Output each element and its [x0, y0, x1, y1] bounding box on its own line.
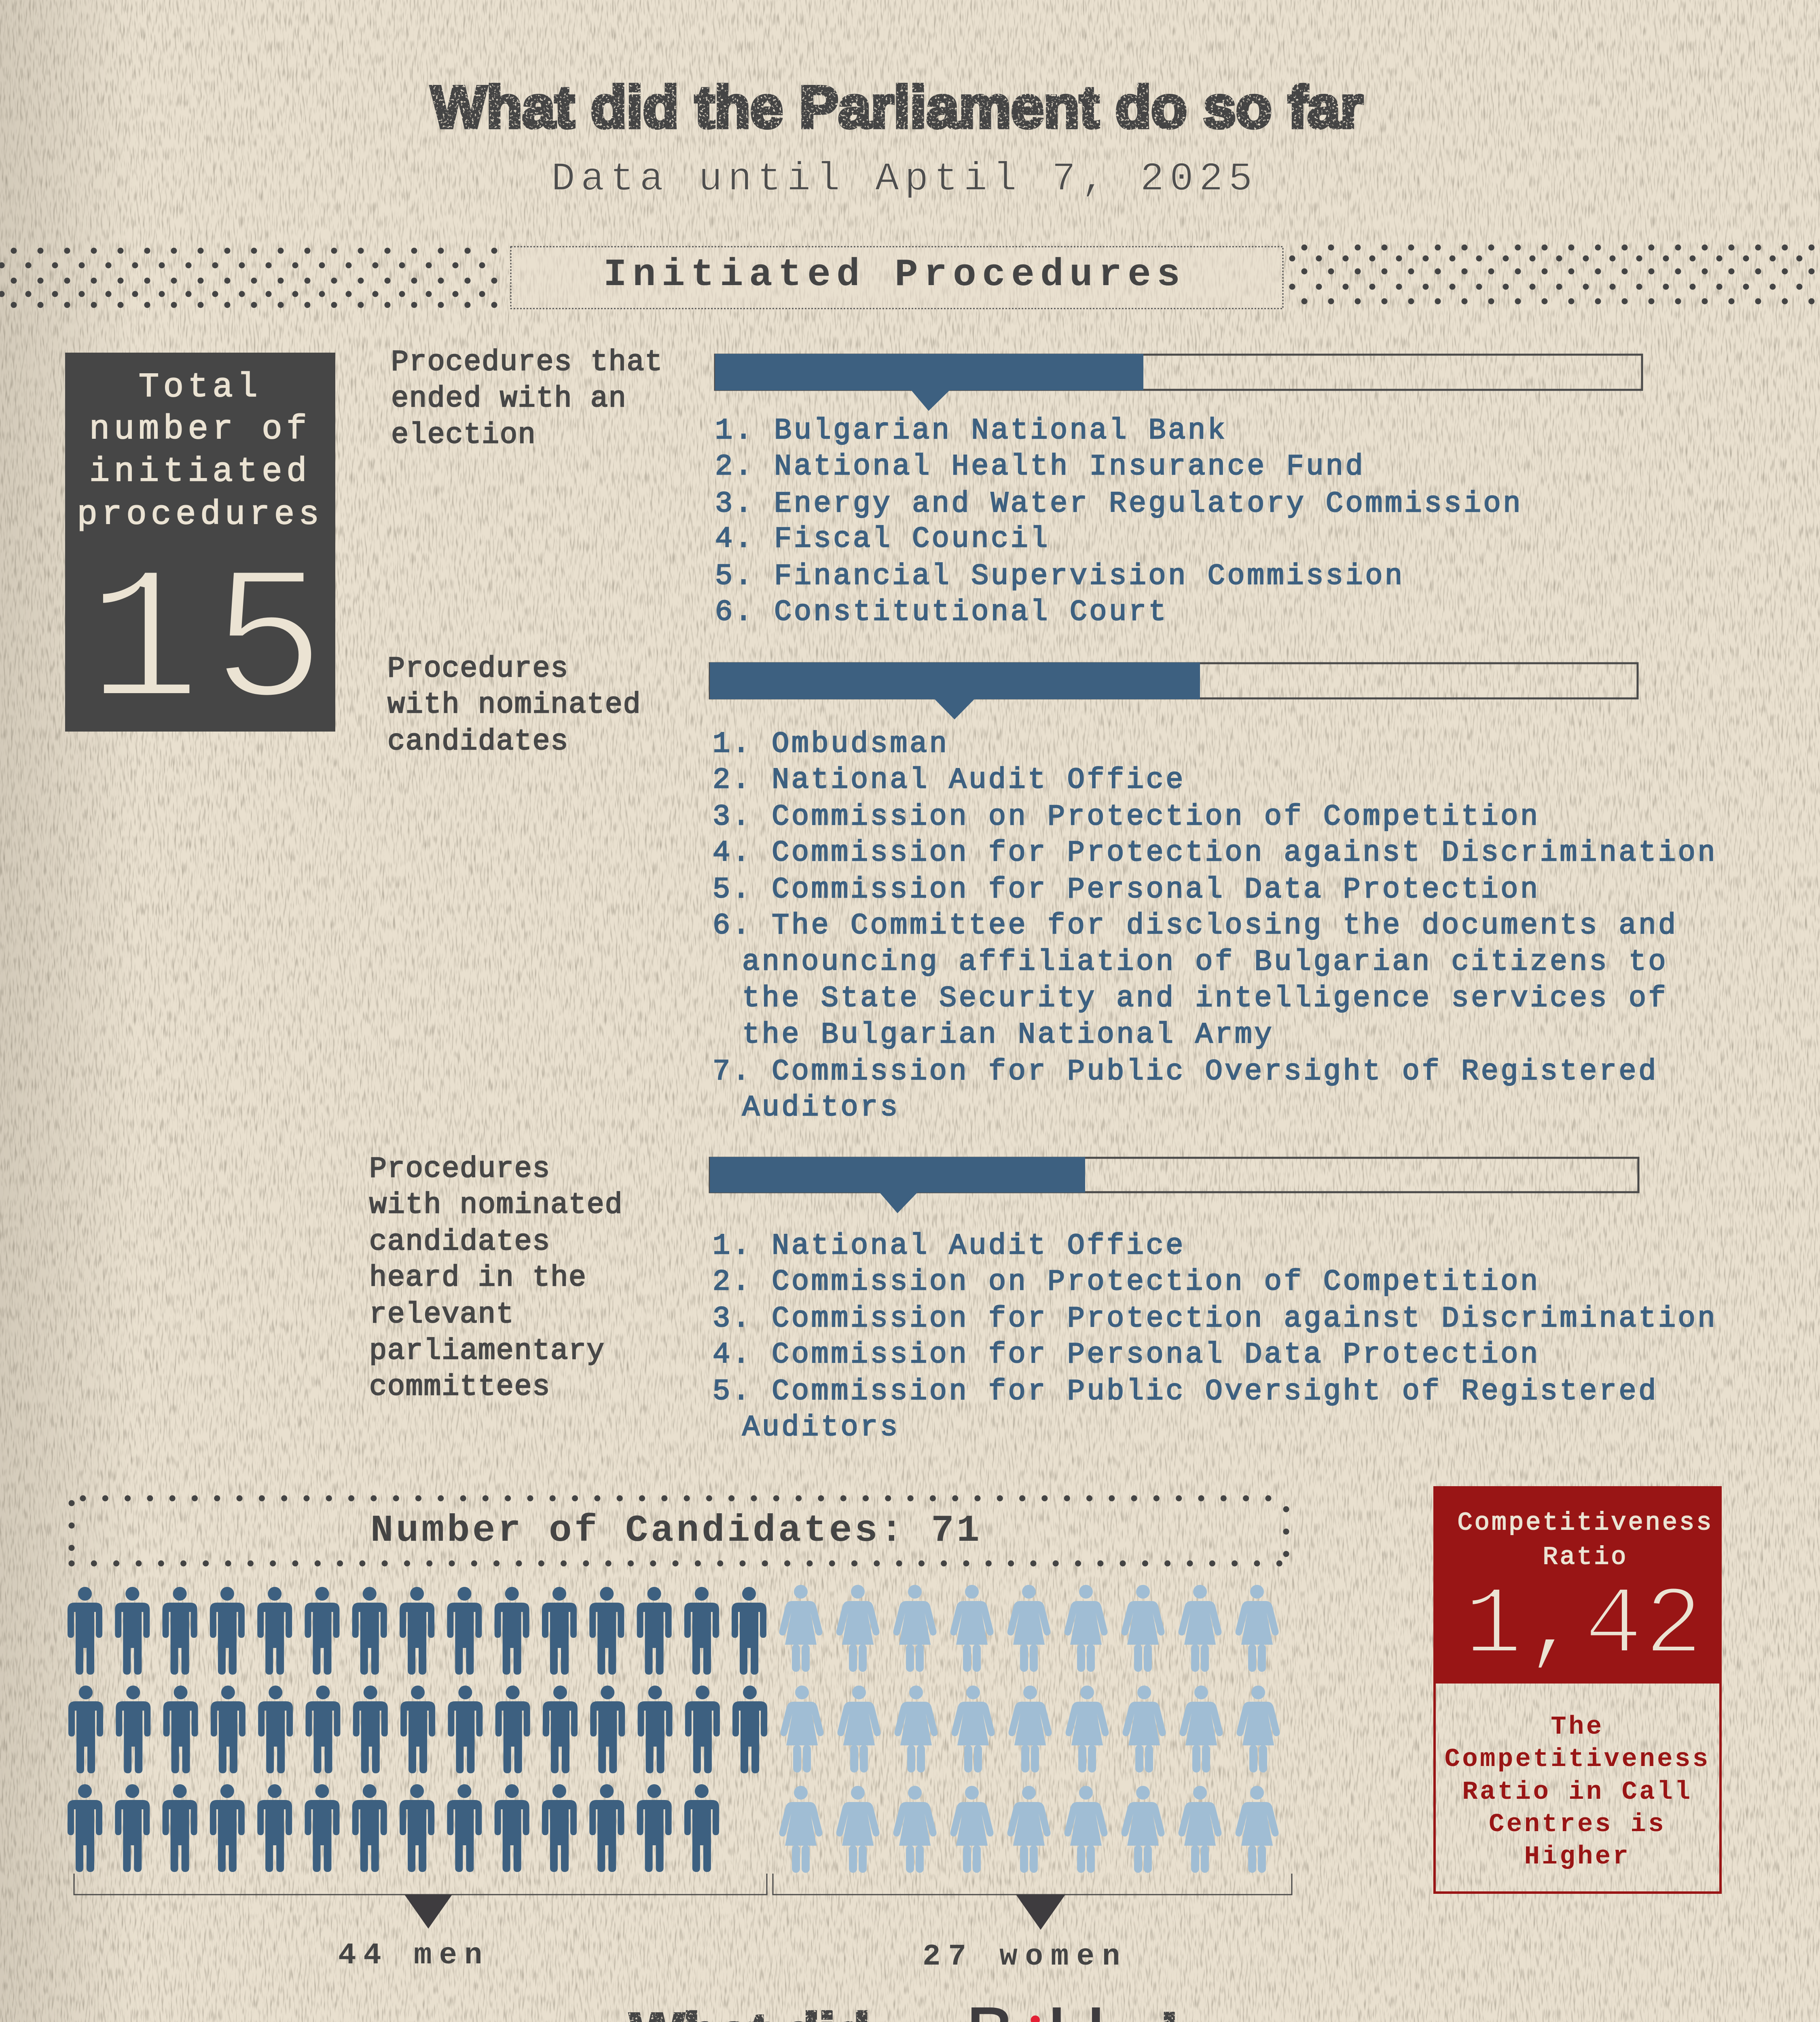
section 2 list: 3. Commission on Protection of Competition	[713, 800, 1540, 833]
panel: competitiveness ratio: The	[1551, 1713, 1604, 1742]
label: 44 men: 44 men	[338, 1939, 489, 1973]
panel: total procedures: initiated	[89, 453, 311, 491]
section 2 list: the Bulgarian National Army	[742, 1018, 1274, 1051]
section 2 label: candidates	[387, 725, 569, 758]
section 1 list: 5. Financial Supervision Commission	[715, 560, 1405, 593]
section 3 label: relevant	[369, 1298, 514, 1331]
section 3 list: 3. Commission for Protection against Discrimination	[713, 1302, 1717, 1335]
panel: total procedures: procedures	[77, 496, 324, 534]
section 3 label	[369, 1153, 623, 1404]
panel: competitiveness ratio: Centres is	[1489, 1810, 1666, 1839]
dotted band right	[1292, 247, 1820, 301]
section 2 label: with nominated	[387, 688, 641, 721]
panel: total procedures: 15	[87, 538, 326, 753]
section 2 label	[387, 652, 641, 758]
section 2 list: 2. National Audit Office	[713, 764, 1185, 797]
panel: total procedures: Total	[139, 368, 262, 407]
section 1 list: 1. Bulgarian National Bank	[715, 414, 1227, 447]
section 1 list: 4. Fiscal Council	[715, 522, 1050, 556]
section 1 label: ended with an	[391, 382, 627, 415]
section 3 list: 4. Commission for Personal Data Protection	[713, 1338, 1540, 1371]
section 2 list: the State Security and intelligence services of	[742, 982, 1668, 1015]
pictogram: men	[68, 1587, 767, 1872]
bracket and arrow: men	[74, 1874, 767, 1929]
section 2 label: Procedures	[387, 652, 569, 685]
section 1 list: 3. Energy and Water Regulatory Commission	[715, 487, 1523, 520]
panel: total procedures	[65, 353, 335, 753]
section 3 progress bar	[710, 1157, 1638, 1213]
section 1 list: 6. Constitutional Court	[715, 596, 1168, 629]
section 2 list: 4. Commission for Protection against Discrimination	[713, 836, 1717, 869]
section 2 list: 1. Ombudsman	[713, 728, 949, 761]
section 3 label: with nominated	[369, 1189, 623, 1222]
heading: initiated procedures	[511, 247, 1283, 309]
panel: competitiveness ratio	[1433, 1486, 1722, 1893]
subtitle: Data until Aptil 7, 2025	[551, 157, 1258, 202]
section 1 list	[715, 414, 1523, 629]
section 3 label: heard in the	[369, 1261, 587, 1294]
section 1 label	[391, 346, 663, 452]
panel: competitiveness ratio: Ratio in Call	[1462, 1778, 1693, 1807]
section 1 progress bar	[715, 354, 1642, 411]
section 2 list: Auditors	[742, 1091, 900, 1124]
section 2 list: 6. The Committee for disclosing the documents and	[713, 909, 1678, 942]
panel: competitiveness ratio: Competitiveness	[1444, 1745, 1710, 1774]
section 3 label: candidates	[369, 1225, 550, 1258]
section 1 label: election	[391, 419, 536, 452]
section 3 list: Auditors	[742, 1411, 900, 1444]
heading: number of candidates: Number of Candidates: 71	[370, 1510, 982, 1552]
heading: what did BiLI do	[630, 1992, 1211, 2022]
section 3 list: 1. National Audit Office	[713, 1229, 1185, 1263]
title: What did the Parliament do so far	[431, 74, 1363, 140]
section 3 label: Procedures	[369, 1153, 550, 1186]
section 2 list: 5. Commission for Personal Data Protection	[713, 873, 1540, 906]
section 3 list: 2. Commission on Protection of Competition	[713, 1265, 1540, 1299]
panel: competitiveness ratio: Competitiveness	[1457, 1508, 1714, 1537]
section 3 list: 5. Commission for Public Oversight of Registered	[713, 1375, 1658, 1408]
heading: number of candidates	[72, 1498, 1286, 1563]
panel: competitiveness ratio: Ratio	[1543, 1543, 1628, 1571]
panel: total procedures: number of	[89, 410, 311, 449]
dotted band left	[2, 251, 508, 305]
section 3 list	[713, 1229, 1717, 1444]
section 2 progress bar	[710, 662, 1638, 719]
section 2 list: announcing affiliation of Bulgarian citizens to	[742, 945, 1668, 979]
heading: initiated procedures: Initiated Procedures	[603, 253, 1186, 297]
panel: competitiveness ratio: Higher	[1524, 1842, 1630, 1872]
section 2 list: 7. Commission for Public Oversight of Registered	[713, 1055, 1658, 1088]
section 1 label: Procedures that	[391, 346, 663, 379]
section 3 label: committees	[369, 1371, 550, 1404]
section 2 list	[713, 728, 1717, 1124]
section 1 list: 2. National Health Insurance Fund	[715, 450, 1365, 483]
panel: competitiveness ratio: 1,42	[1464, 1571, 1703, 1681]
label: 27 women: 27 women	[923, 1940, 1128, 1974]
section 3 label: parliamentary	[369, 1335, 605, 1368]
bracket and arrow: women	[773, 1874, 1292, 1930]
pictogram: women	[779, 1585, 1280, 1873]
